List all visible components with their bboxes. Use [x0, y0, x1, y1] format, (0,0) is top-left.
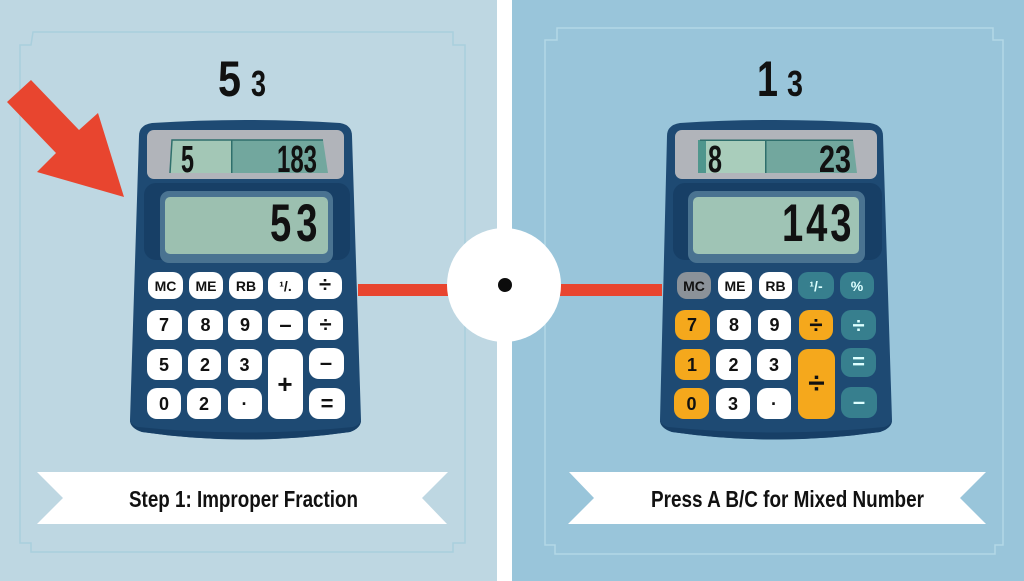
arrow: red pointer — [7, 80, 124, 197]
keypad: RB — [765, 278, 786, 294]
keypad: 3 — [239, 355, 250, 375]
top display strip: 5 — [181, 139, 194, 181]
keypad: 3 — [769, 355, 779, 375]
keypad: 0 — [159, 394, 169, 414]
ribbon: press A B/C — [568, 472, 986, 524]
main display bezel — [144, 183, 350, 260]
top display strip: 23 — [819, 139, 851, 181]
main display frame — [688, 191, 865, 263]
main display screen — [693, 193, 859, 254]
heading: right fraction: 3 — [787, 63, 803, 104]
keypad: 9 — [240, 315, 250, 335]
left panel frame — [20, 32, 465, 552]
keypad: 0 — [686, 394, 697, 414]
right panel frame — [545, 28, 1003, 554]
keypad: 2 — [200, 355, 210, 375]
keypad: ME — [724, 278, 746, 294]
center circle with dot — [447, 228, 561, 342]
keypad: ÷ — [808, 367, 825, 400]
keypad: MC — [155, 278, 176, 294]
heading: left fraction: 3 — [251, 63, 266, 104]
keypad: · — [771, 394, 777, 414]
keypad: 1 — [687, 355, 697, 375]
calculator: right — [660, 120, 892, 440]
keypad: 9 — [769, 315, 780, 335]
keypad: 3 — [728, 394, 738, 414]
connector line: right — [559, 284, 662, 296]
keypad: 8 — [729, 315, 739, 335]
panel: left background — [0, 0, 497, 581]
main display screen: 143 — [782, 193, 854, 252]
keypad: ¹/. — [279, 278, 292, 294]
keypad: 2 — [728, 355, 739, 375]
keypad: ¹/- — [809, 278, 823, 294]
heading: right fraction: 1 — [757, 51, 778, 107]
heading: right fraction — [757, 51, 803, 107]
keypad: = — [852, 349, 865, 374]
keypad: + — [277, 369, 293, 399]
keypad: = — [321, 391, 333, 416]
heading: left fraction — [218, 51, 266, 107]
keypad: RB — [236, 278, 256, 294]
keypad: – — [853, 389, 865, 414]
keypad — [674, 272, 877, 419]
ribbon: step 1: Step 1: Improper Fraction — [129, 486, 358, 512]
keypad: ÷ — [809, 312, 823, 339]
keypad: – — [320, 350, 332, 375]
keypad: 5 — [159, 355, 169, 375]
main display bezel — [673, 183, 882, 260]
top display strip — [698, 139, 857, 181]
panel: right background — [512, 0, 1024, 581]
keypad: 7 — [687, 315, 697, 335]
keypad: ME — [196, 278, 216, 294]
keypad: – — [279, 312, 292, 337]
keypad: ÷ — [319, 272, 331, 297]
top display housing — [147, 130, 344, 179]
calculator body — [130, 120, 361, 440]
keypad: 7 — [159, 315, 169, 335]
keypad: ÷ — [852, 313, 865, 338]
bottom lip — [660, 420, 892, 440]
keypad: MC — [683, 278, 705, 294]
keypad: ÷ — [319, 312, 332, 337]
main display screen — [165, 193, 328, 254]
top display housing — [675, 130, 877, 179]
ribbon: step 1 — [37, 472, 448, 524]
keypad: 2 — [199, 394, 209, 414]
keypad: % — [851, 278, 864, 294]
keypad — [147, 272, 345, 419]
top display strip: 183 — [277, 139, 317, 181]
keypad: 8 — [200, 315, 211, 335]
calculator body — [660, 120, 892, 440]
top display strip — [170, 139, 328, 181]
calculator: left — [130, 120, 361, 440]
ribbon: press A B/C: Press A B/C for Mixed Number — [651, 486, 924, 512]
top display strip: 8 — [708, 139, 722, 181]
main display screen: 53 — [270, 193, 323, 252]
heading: left fraction: 5 — [218, 51, 241, 107]
connector line: left — [358, 284, 450, 296]
main display frame — [160, 191, 333, 263]
keypad: · — [242, 394, 248, 414]
bottom lip — [130, 420, 361, 440]
